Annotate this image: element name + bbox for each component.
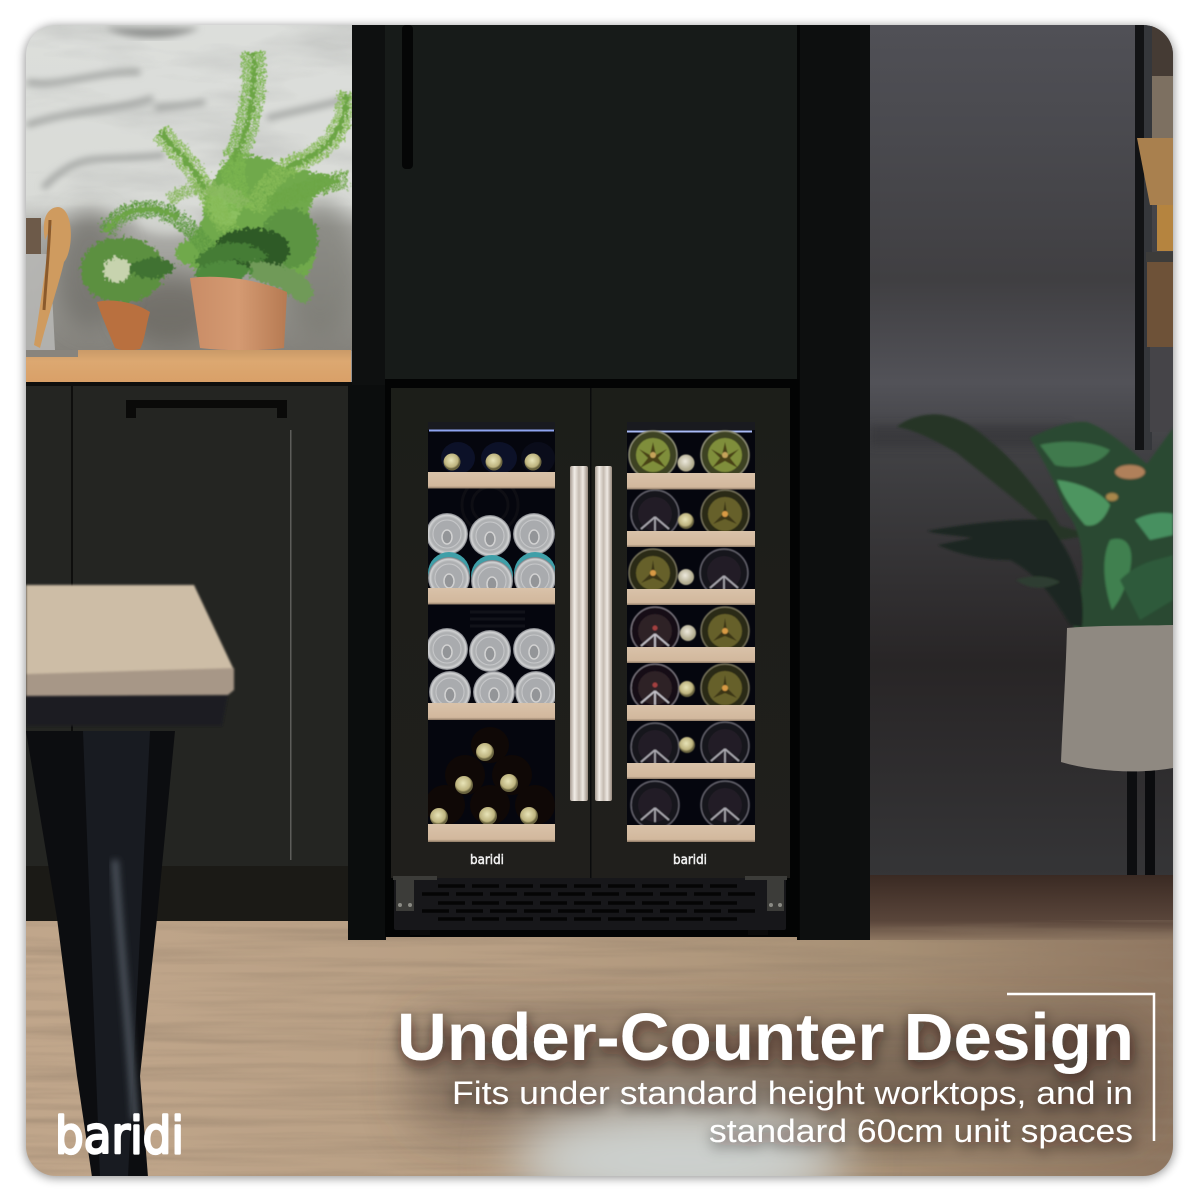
heading: Under-Counter Design	[397, 1000, 1134, 1075]
textured pot	[1061, 625, 1173, 771]
plinth vent grille	[394, 878, 786, 935]
beverage cans lower	[428, 628, 555, 703]
terracotta pots	[97, 277, 287, 350]
table	[26, 585, 234, 1177]
marble backsplash	[26, 25, 358, 351]
door logo right: baridi	[673, 853, 707, 868]
fern plant	[106, 52, 348, 302]
cabinet handle	[126, 400, 287, 418]
subtitle text	[452, 1075, 1133, 1149]
beverage cans upper	[428, 513, 555, 588]
left door shelves	[427, 472, 556, 842]
right door shelves	[626, 473, 756, 842]
door handles	[570, 466, 612, 801]
top bottles	[441, 442, 555, 474]
large potted plant	[897, 414, 1173, 771]
table top	[26, 585, 234, 696]
tall door handle	[402, 25, 413, 169]
glass jar and wooden spoon	[26, 207, 71, 350]
corner bracket	[1007, 994, 1154, 1141]
hinge brackets	[393, 876, 787, 911]
plant stand legs	[1127, 770, 1155, 875]
brand logo: baridi	[55, 1107, 184, 1166]
stacked bottles	[425, 727, 555, 826]
wine cooler appliance	[391, 388, 790, 935]
left door window	[425, 422, 557, 842]
right wall	[868, 25, 1173, 877]
wine bottles	[629, 431, 749, 829]
floor	[26, 875, 1173, 1176]
lower cabinets	[26, 382, 349, 921]
tall housing unit	[348, 25, 870, 940]
fan and vents	[462, 477, 525, 626]
subtitle text: standard 60cm unit spaces	[709, 1113, 1133, 1149]
subtitle text: Fits under standard height worktops, and in	[452, 1075, 1133, 1111]
floor light reflection	[515, 1102, 845, 1200]
headline shadow panel	[410, 1020, 1150, 1130]
door logo left: baridi	[470, 853, 504, 868]
right door window	[626, 422, 756, 842]
wooden worktop	[26, 350, 351, 382]
table legs	[26, 731, 175, 1177]
small herb plant	[80, 237, 174, 303]
table apron	[26, 694, 228, 726]
shelving unit	[1135, 25, 1173, 450]
